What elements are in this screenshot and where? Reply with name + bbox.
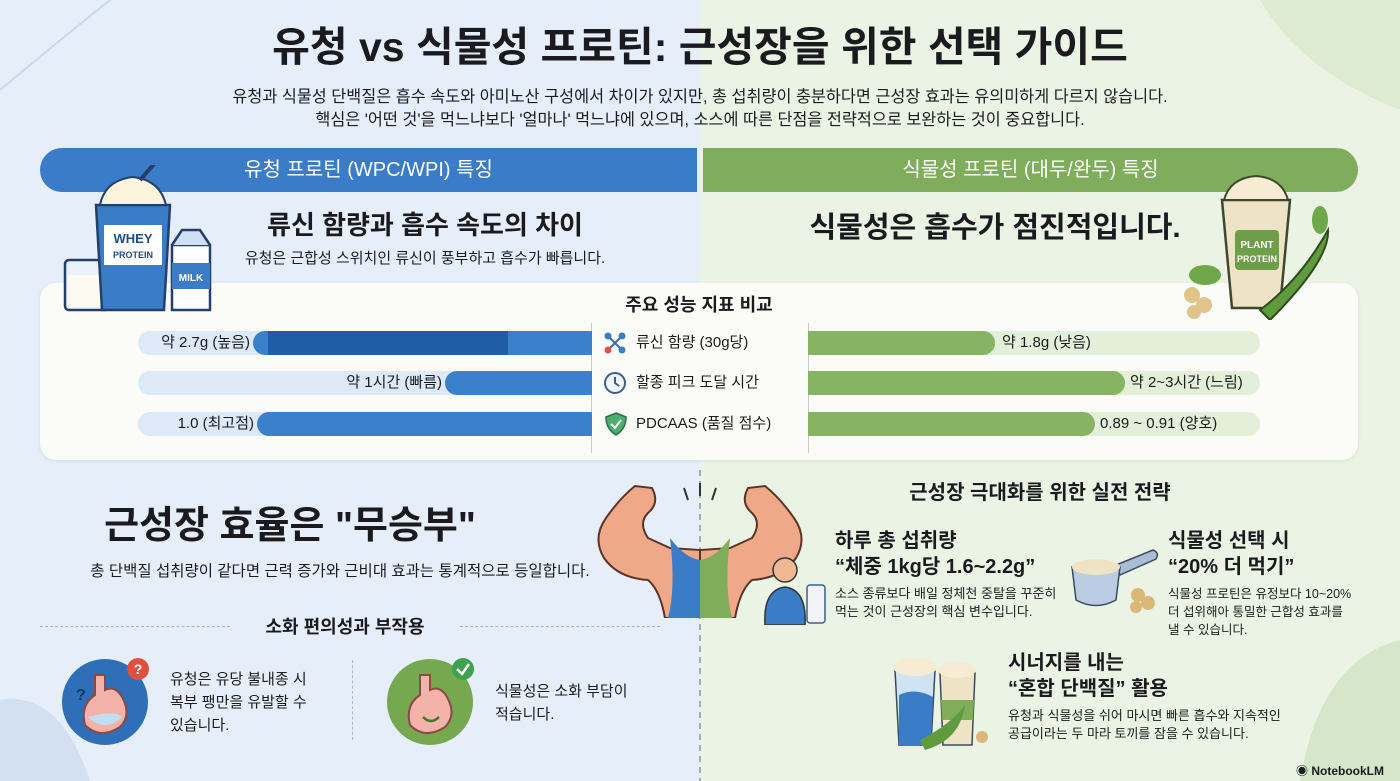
row: peak time: 할종 피크 도달 시간 (636, 374, 759, 391)
block: mixed protein (1008, 652, 1281, 741)
icon: whey tub and milk: WHEY (114, 231, 153, 246)
icon: mixed shakes (893, 658, 988, 750)
text: whey digestion: 유청은 유당 불내종 시 (170, 671, 307, 688)
block: plant 20%: 식물성 선택 시 (1168, 530, 1290, 552)
text: muscle desc: 총 단백질 섭취량이 같다면 근력 증가와 근비대 효과는 통계적으로 등일합니다. (90, 563, 590, 580)
text: plant digestion: 적습니다. (495, 706, 554, 723)
block: daily intake (835, 530, 1056, 619)
text: plant digestion: 식물성은 소화 부담이 (495, 683, 628, 700)
subtitle: 유청과 식물성 단백질은 흡수 속도와 아미노산 구성에서 차이가 있지만, 총 섭취량이 충분하다면 근성장 효과는 유의미하게 다르지 않습니다. (232, 88, 1168, 106)
text: plant digestion (495, 683, 628, 723)
row: PDCAAS: PDCAAS (품질 점수) (636, 415, 771, 432)
text: whey digestion: 복부 팽만을 유발할 수 (170, 694, 307, 711)
header bar: plant (703, 148, 1358, 192)
block: plant 20% (1168, 530, 1351, 637)
icon: scoop (1071, 549, 1158, 613)
subtitle (232, 88, 1168, 129)
header bar: whey: 유청 프로틴 (WPC/WPI) 특징 (244, 159, 493, 181)
header bar: whey (40, 148, 697, 192)
section heading: digestion: 소화 편의성과 부작용 (265, 617, 425, 637)
block: mixed protein: 시너지를 내는 (1008, 652, 1124, 674)
text: whey digestion (170, 671, 307, 734)
icon: plant protein cup: PLANT (1240, 240, 1274, 251)
row: PDCAAS: 1.0 (최고점) (178, 415, 254, 432)
icon: flexing torso (597, 483, 803, 618)
block: daily intake: “체중 1kg당 1.6~2.2g” (835, 556, 1035, 578)
header bar: plant: 식물성 프로틴 (대두/완두) 특징 (902, 159, 1159, 181)
row: leucine (138, 331, 1260, 355)
heading: leucine: 류신 함량과 흡수 속도의 차이 (267, 210, 583, 240)
icon: whey tub and milk: PROTEIN (113, 250, 153, 260)
icon: whey tub and milk (64, 165, 212, 312)
icon: whey stomach: ? (134, 661, 142, 677)
row: peak time: 약 1시간 (빠름) (346, 374, 442, 391)
block: plant 20%: 낼 수 있습니다. (1168, 623, 1247, 637)
row: leucine: 류신 함량 (30g당) (636, 334, 748, 351)
icon: person with shaker (764, 557, 826, 625)
block: mixed protein: 공급이라는 두 마라 토끼를 잠을 수 있습니다. (1008, 726, 1249, 741)
block: daily intake: 먹는 것이 근성장의 핵심 변수입니다. (835, 604, 1032, 619)
icon: plant stomach (387, 658, 474, 745)
row: leucine: 약 2.7g (높음) (161, 334, 250, 351)
block: daily intake: 하루 총 섭취량 (835, 530, 957, 552)
title: 유청 vs 식물성 프로틴: 근성장을 위한 선택 가이드 (272, 24, 1128, 70)
heading: plant: 식물성은 흡수가 점진적입니다. (809, 212, 1180, 244)
block: daily intake: 소스 종류보다 배일 정체천 중탈을 꾸준히 (835, 586, 1056, 601)
block: plant 20%: “20% 더 먹기” (1168, 556, 1294, 578)
panel title: 주요 성능 지표 비교 (625, 295, 773, 315)
icon: whey stomach: ? (76, 687, 86, 704)
row: PDCAAS (138, 412, 1260, 436)
icon: whey tub and milk: MILK (179, 273, 204, 284)
icon: whey stomach (62, 658, 149, 745)
text: whey desc: 유청은 근합성 스위치인 류신이 풍부하고 흡수가 빠릅니다. (245, 250, 605, 267)
logo: NotebookLM: ◉ NotebookLM (1296, 764, 1384, 778)
block: mixed protein: “혼합 단백질” 활용 (1008, 678, 1168, 700)
icon: plant protein cup: PROTEIN (1237, 254, 1277, 264)
subtitle: 핵심은 '어떤 것'을 먹느냐보다 '얼마나' 먹느냐에 있으며, 소스에 따른 단점을 전략적으로 보완하는 것이 중요합니다. (315, 111, 1085, 129)
row: leucine: 약 1.8g (낮음) (1002, 334, 1091, 351)
panel: performance comparison (40, 283, 1358, 460)
block: plant 20%: 식물성 프로틴은 유정보다 10~20% (1168, 587, 1351, 601)
icon: plant protein cup (1184, 175, 1330, 320)
heading: muscle draw: 근성장 효율은 "무승부" (104, 505, 476, 547)
row: PDCAAS: 0.89 ~ 0.91 (양호) (1100, 415, 1217, 432)
row: peak time: 약 2~3시간 (느림) (1130, 374, 1243, 391)
block: mixed protein: 유청과 식물성을 쉬어 마시면 빠른 흡수와 지속적인 (1008, 708, 1281, 723)
text: whey digestion: 있습니다. (170, 717, 229, 734)
heading: strategy: 근성장 극대화를 위한 실전 전략 (909, 482, 1171, 504)
row: peak time (138, 371, 1260, 395)
block: plant 20%: 더 섭위해아 통밀한 근합성 효과를 (1168, 605, 1343, 619)
